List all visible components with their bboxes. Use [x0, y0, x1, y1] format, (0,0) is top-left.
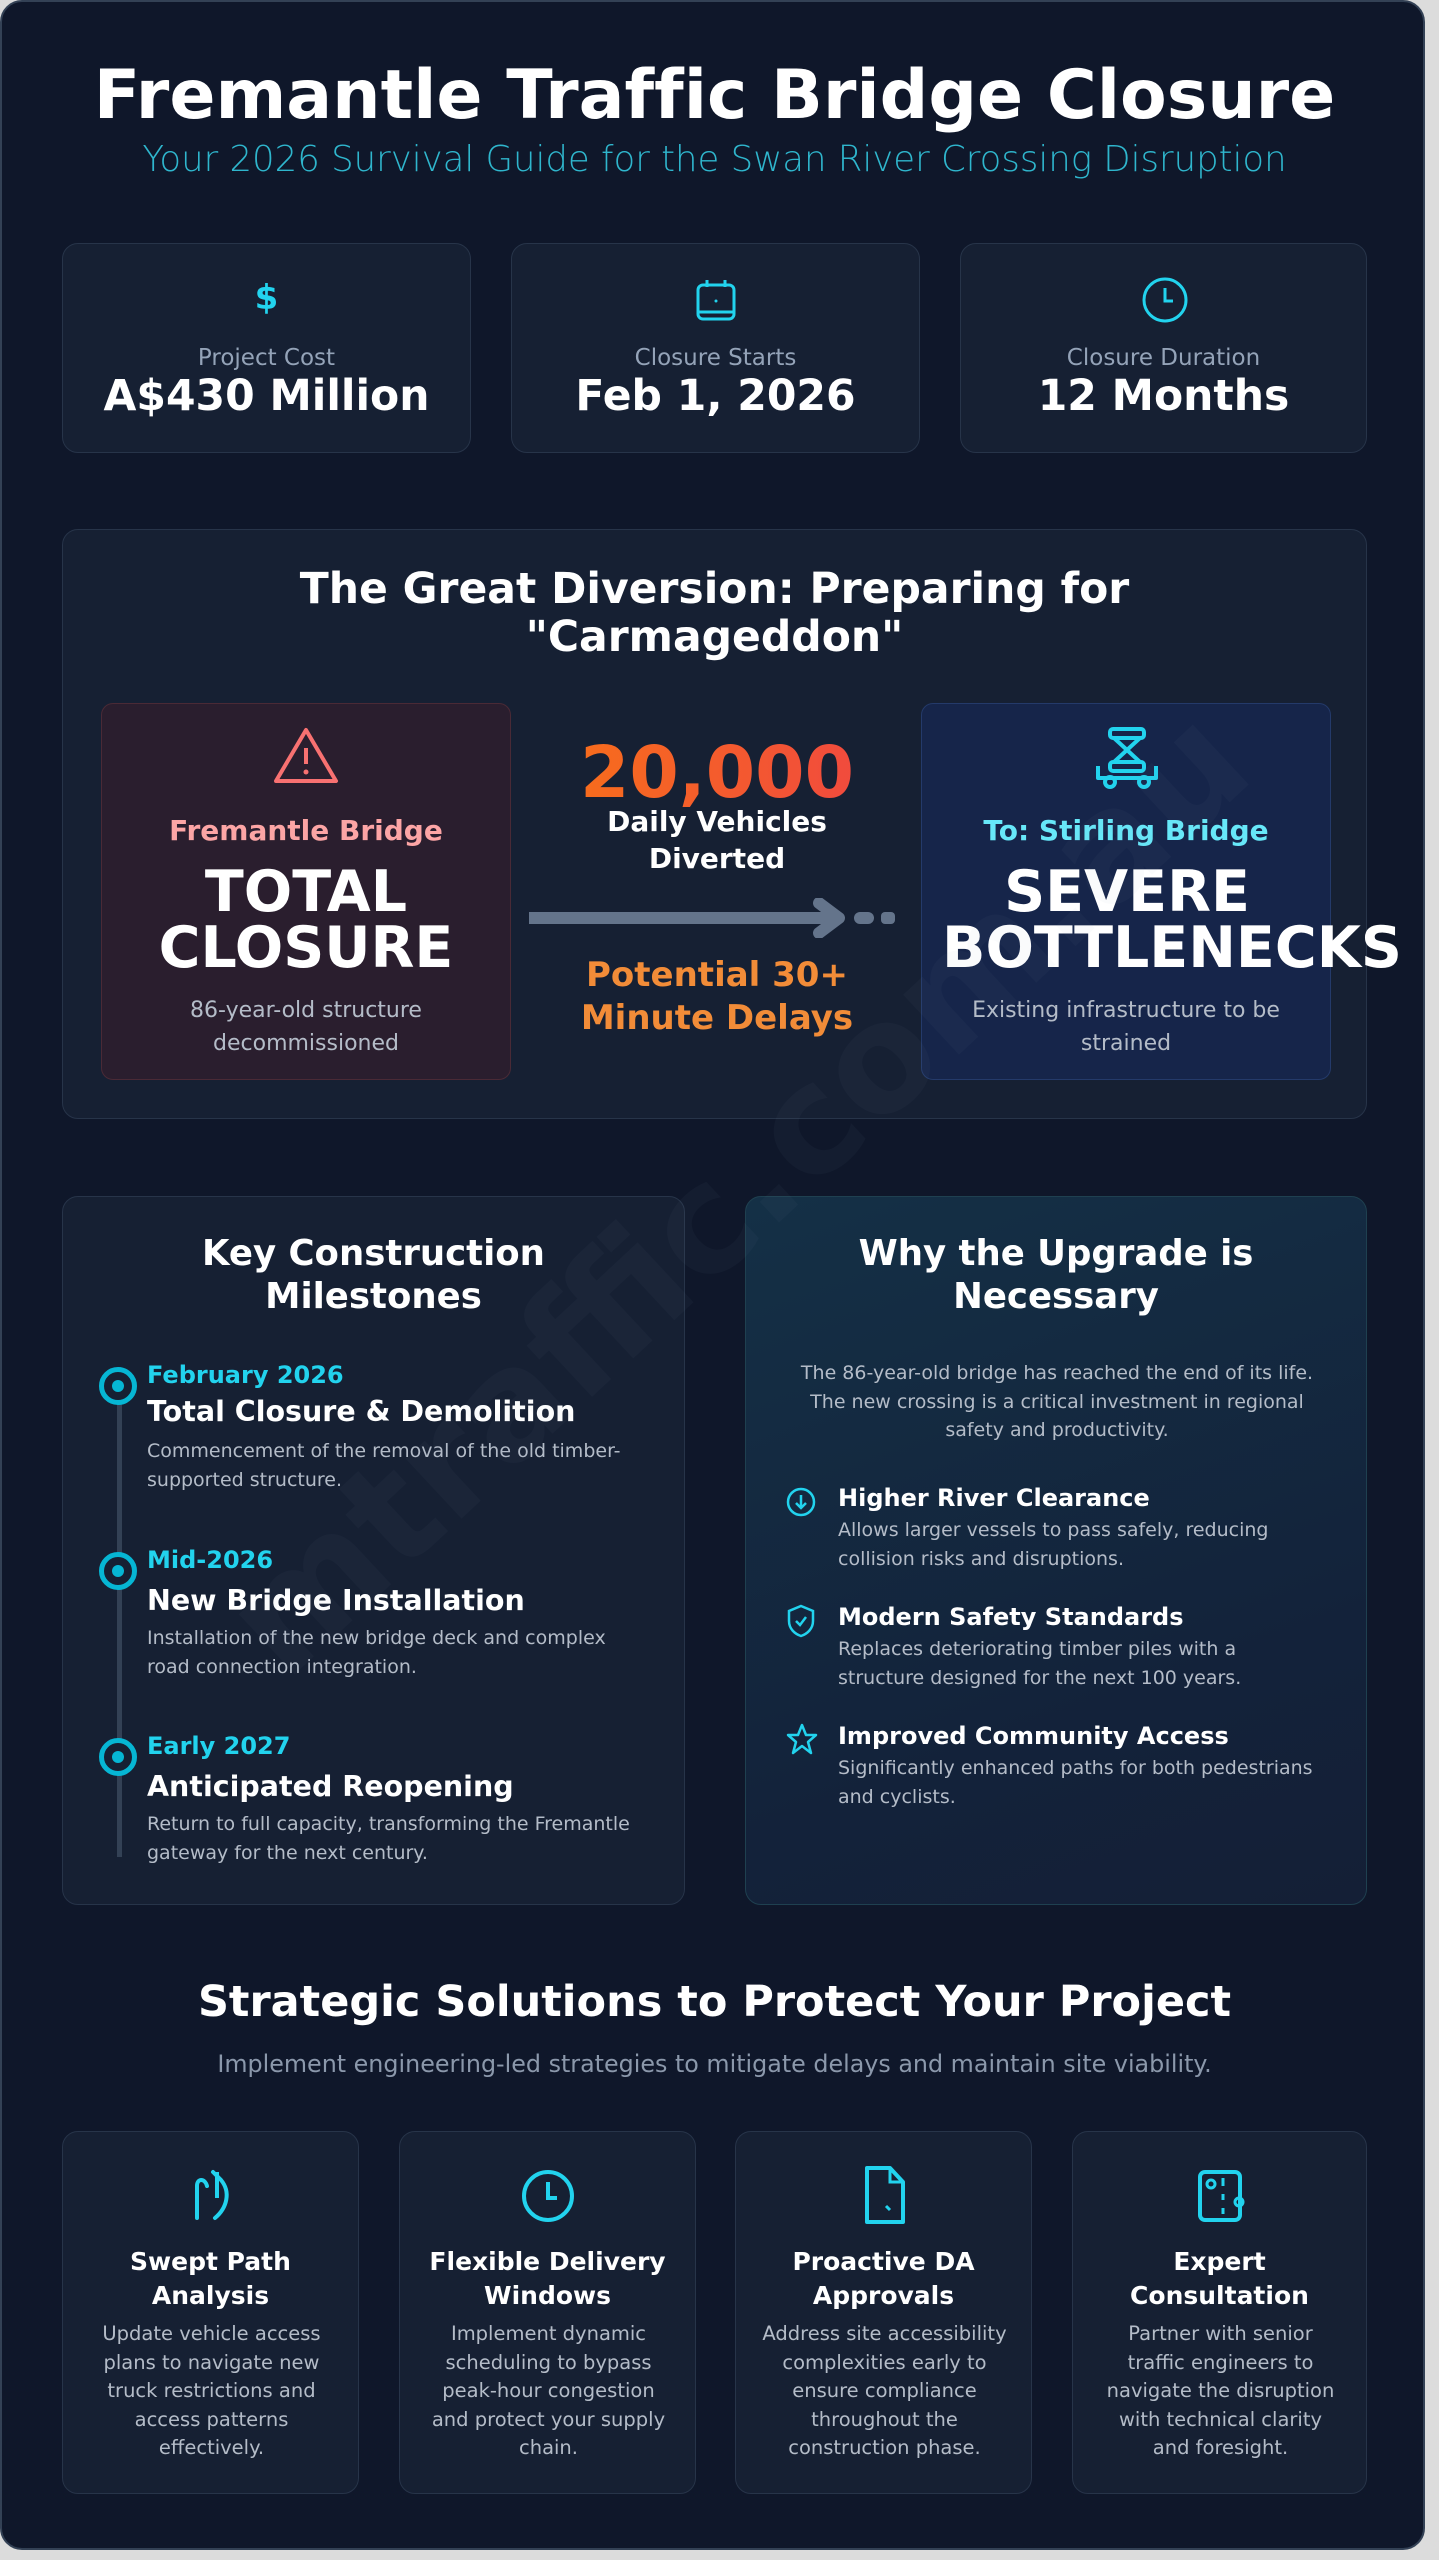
desc: Update vehicle access plans to navigate new truck restrictions and access patterns effectively.: [102, 2322, 321, 2459]
date: Mid-2026: [147, 1546, 273, 1574]
stat card: start: [511, 243, 920, 453]
milestone 2: [99, 1546, 606, 1678]
stat card: cost: [62, 243, 471, 453]
icon: clock: [522, 2170, 574, 2222]
title: [429, 2247, 666, 2310]
icon: clock: [1142, 278, 1188, 322]
desc: Replaces deteriorating timber piles with a structure designed for the next 100 years.: [838, 1638, 1241, 1689]
desc: Installation of the new bridge deck and complex road connection integration.: [147, 1627, 606, 1678]
benefit 3: [786, 1722, 1313, 1808]
title: Expert: [1173, 2247, 1266, 2276]
marker: [99, 1552, 137, 1590]
title: Consultation: [1130, 2281, 1309, 2310]
solution card: swept path: [62, 2131, 359, 2494]
label: Project Cost: [198, 345, 335, 371]
label: Daily Vehicles: [607, 805, 827, 838]
stat card: duration: [960, 243, 1367, 453]
label: To: Stirling Bridge: [983, 814, 1269, 847]
title: Total Closure & Demolition: [147, 1395, 575, 1428]
label: Closure Duration: [1067, 345, 1260, 371]
milestone 3: [99, 1732, 630, 1864]
desc: [190, 998, 422, 1056]
watermark: mtraffic.com.au: [191, 675, 1283, 1709]
desc: strained: [1081, 1031, 1171, 1056]
icon: plan: [1198, 2170, 1244, 2222]
title: Windows: [484, 2281, 611, 2310]
desc: [972, 998, 1280, 1056]
milestone 1: [99, 1361, 621, 1491]
heading: The Great Diversion: Preparing for: [300, 565, 1129, 614]
arrow: [529, 898, 895, 938]
statement: BOTTLENECKS: [942, 915, 1402, 981]
desc: Implement dynamic scheduling to bypass peak-hour congestion and protect your supply chain.: [432, 2322, 665, 2459]
delay: Minute Delays: [581, 998, 853, 1038]
statement: CLOSURE: [159, 915, 453, 981]
label: Closure Starts: [635, 345, 796, 371]
panel: milestones: [62, 1196, 685, 1905]
icon: hourglass car: [1096, 727, 1158, 789]
intro: The 86-year-old bridge has reached the end of its life. The new crossing is a critical investment in regional safety and productivity.: [801, 1362, 1313, 1441]
icon: dollar: $: [255, 278, 278, 318]
subtitle: Your 2026 Survival Guide for the Swan River Crossing Disruption: [142, 139, 1287, 180]
date: Early 2027: [147, 1732, 290, 1760]
panel: why upgrade: [745, 1196, 1367, 1905]
icon: down circle: [786, 1488, 816, 1516]
desc: Address site accessibility complexities early to ensure compliance throughout the construction phase.: [762, 2322, 1007, 2459]
desc: Existing infrastructure to be: [972, 998, 1280, 1023]
title: Anticipated Reopening: [147, 1770, 514, 1803]
solution card: expert: [1072, 2131, 1367, 2494]
desc: Allows larger vessels to pass safely, reducing collision risks and disruptions.: [838, 1519, 1268, 1570]
solution card: DA approvals: [735, 2131, 1032, 2494]
icon: star: [786, 1724, 818, 1754]
heading: Necessary: [953, 1276, 1159, 1317]
number: 20,000: [580, 731, 854, 814]
label: [607, 805, 827, 875]
title: Fremantle Traffic Bridge Closure: [94, 56, 1335, 135]
section subtitle: Implement engineering-led strategies to mitigate delays and maintain site viability.: [217, 2050, 1212, 2078]
desc: Significantly enhanced paths for both pedestrians and cyclists.: [838, 1757, 1313, 1808]
date: February 2026: [147, 1361, 344, 1389]
desc: 86-year-old structure: [190, 998, 422, 1023]
title: [130, 2247, 291, 2310]
desc: decommissioned: [213, 1031, 399, 1056]
desc: Partner with senior traffic engineers to navigate the disruption with technical clarity and foresight.: [1107, 2322, 1334, 2459]
value: A$430 Million: [104, 372, 430, 421]
heading: Why the Upgrade is: [859, 1233, 1253, 1274]
heading: [202, 1233, 545, 1317]
title: Swept Path: [130, 2247, 291, 2276]
solution card: delivery: [399, 2131, 696, 2494]
title: Flexible Delivery: [429, 2247, 666, 2276]
icon: shield: [788, 1604, 814, 1638]
marker: [99, 1367, 137, 1405]
icon: warning: [274, 728, 338, 783]
heading: Key Construction: [202, 1233, 545, 1274]
heading: [300, 565, 1130, 662]
marker: [99, 1738, 137, 1776]
title: Proactive DA: [792, 2247, 975, 2276]
value: 12 Months: [1038, 372, 1289, 421]
statement: TOTAL: [205, 859, 407, 925]
statement: SEVERE: [1004, 859, 1250, 925]
statement: [159, 859, 453, 981]
panel: diversion: [62, 529, 1367, 1119]
desc: Commencement of the removal of the old timber-supported structure.: [147, 1440, 621, 1491]
timline line: [117, 1383, 122, 1857]
title: Analysis: [152, 2281, 269, 2310]
label: Diverted: [649, 842, 785, 875]
title: Approvals: [813, 2281, 954, 2310]
center stat: [529, 731, 895, 1038]
box: Stirling Bridge: [921, 703, 1331, 1080]
benefit 2: [788, 1603, 1241, 1689]
title: Higher River Clearance: [838, 1484, 1150, 1512]
number: [523, 733, 911, 813]
title: [1130, 2247, 1309, 2310]
value: Feb 1, 2026: [575, 372, 856, 421]
label: Fremantle Bridge: [169, 814, 443, 847]
desc: Return to full capacity, transforming the Fremantle gateway for the next century.: [147, 1813, 630, 1864]
icon: calendar: [696, 280, 736, 320]
title: Improved Community Access: [838, 1722, 1229, 1750]
box: Fremantle Bridge: [101, 703, 511, 1080]
heading: [859, 1233, 1253, 1317]
section heading: strategic solutions: Strategic Solutions to Protect Your Project: [198, 1977, 1231, 2027]
icon: document: [865, 2166, 905, 2224]
heading: Milestones: [265, 1276, 482, 1317]
title: Modern Safety Standards: [838, 1603, 1184, 1631]
title: [792, 2247, 975, 2310]
delay: [581, 955, 853, 1038]
delay: Potential 30+: [586, 955, 848, 995]
benefit 1: [786, 1484, 1268, 1570]
title: New Bridge Installation: [147, 1584, 525, 1617]
icon: path: [195, 2170, 229, 2220]
heading: "Carmageddon": [526, 613, 903, 662]
statement: [942, 859, 1402, 981]
